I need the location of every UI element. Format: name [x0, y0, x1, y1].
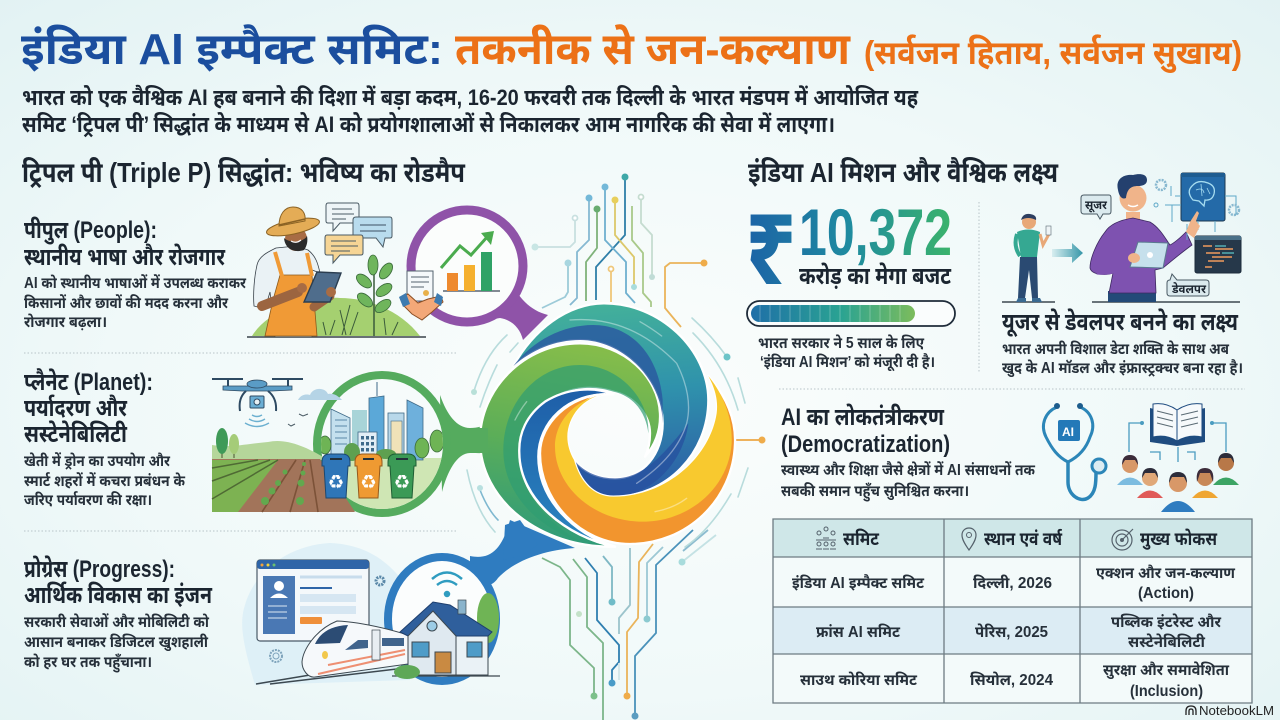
people body: [24, 274, 247, 331]
democratization heading: AI का लोकतंत्रीकरण: [781, 403, 945, 431]
table rows background: [773, 519, 1252, 703]
swirl: dark inner teal: [513, 325, 663, 423]
title: इंडिया AI इम्पैक्ट समिट:: [21, 23, 443, 74]
divider: [779, 388, 1245, 390]
table header: summit: समिट: [843, 529, 879, 549]
table row: France: [816, 612, 1222, 651]
planet body: जरिए पर्यावरण की रक्षा।: [24, 491, 152, 509]
table row: France: पेरिस, 2025: [975, 622, 1048, 641]
icon: certificate and handshake: [399, 271, 443, 320]
big number: [745, 183, 952, 308]
divider: [24, 352, 456, 354]
panel: people: [24, 203, 548, 340]
arrow: user to developer: [1052, 243, 1083, 263]
callout: user bubble: [1081, 195, 1111, 219]
table row: South Korea: साउथ कोरिया समिट: [800, 671, 918, 689]
icon: blue ring: [388, 520, 575, 681]
heading: India AI mission: इंडिया AI मिशन और वैश्विक लक्ष्य: [748, 156, 1059, 188]
progress body: आसान बनाकर डिजिटल खुशहाली: [24, 633, 208, 652]
background blob: [242, 543, 410, 685]
user to developer body: खुद के AI मॉडल और इंफ्रास्ट्रक्चर बना रहा है।: [1002, 358, 1243, 378]
circuit lines bottom: [542, 530, 716, 720]
icon: drone: [212, 379, 303, 426]
table header: focus: मुख्य फोकस: [1140, 529, 1218, 550]
title: (सर्वजन हिताय, सर्वजन सुखाय): [864, 34, 1242, 74]
budget caption: करोड़ का मेगा बजट: [799, 262, 952, 290]
swirl: blue band: [519, 389, 615, 547]
planet body: [24, 451, 186, 509]
planet heading: [24, 368, 153, 448]
table header: place and year: स्थान एवं वर्ष: [984, 528, 1063, 549]
table row: India: दिल्ली, 2026: [973, 574, 1052, 592]
icon: wifi: [432, 572, 462, 596]
planet heading: प्लैनेट (Planet):: [24, 368, 153, 396]
icon: developer person: [1090, 174, 1192, 302]
table: summits: [773, 519, 1252, 703]
icon: recycling bins: ♻: [395, 474, 409, 490]
progress bar: [747, 301, 955, 326]
illustration: farm field: [212, 414, 355, 512]
chart: growth bars and arrow: [441, 231, 500, 291]
democratization body: [781, 460, 1036, 502]
progress heading: प्रोग्रेस (Progress):: [24, 555, 175, 583]
icon: code panel: [1195, 236, 1241, 273]
intro text: [22, 84, 918, 138]
swirl: dark lower blue: [574, 423, 688, 497]
icon: bullet train: [256, 621, 408, 684]
people heading: [24, 216, 225, 271]
people heading: स्थानीय भाषा और रोजगार: [24, 243, 225, 271]
planet heading: पर्यादरण और: [24, 394, 127, 422]
table row: France: सस्टेनेबिलिटी: [1128, 632, 1205, 651]
progress body: [24, 612, 209, 673]
panel: progress: [24, 520, 575, 685]
icon: recycling bins: ♻: [362, 474, 376, 490]
user to developer heading: यूजर से डेवलपर बनने का लक्ष्य: [1002, 308, 1239, 337]
intro text: भारत को एक वैश्विक AI हब बनाने की दिशा में बड़ा कदम, 16-20 फरवरी तक दिल्ली के भारत मंडपम में आयोजित यह: [22, 84, 918, 111]
icon: house: [392, 600, 500, 679]
democratization body: स्वास्थ्य और शिक्षा जैसे क्षेत्रों में AI संसाधनों तक: [781, 460, 1036, 479]
people body: रोजगार बढ़ला।: [24, 313, 107, 331]
connector to democratization: [735, 436, 766, 444]
icon: small user: [1002, 214, 1240, 302]
illustration: smart city: [319, 382, 444, 513]
big number: ₹: [745, 183, 796, 308]
callout: user bubble: सूजर: [1085, 198, 1108, 213]
icon: group of people: [1117, 453, 1239, 512]
table row: India: एक्शन और जन-कल्याण: [1096, 564, 1235, 582]
table row: India: [792, 564, 1235, 602]
swirl: highlights: [515, 320, 689, 512]
progress heading: आर्थिक विकास का इंजन: [24, 581, 213, 609]
big number: 10,372: [799, 195, 952, 269]
budget body: [758, 333, 935, 372]
intro text: समिट ‘ट्रिपल पी’ सिद्धांत के माध्यम से AI को प्रयोगशालाओं से निकालकर आम नागरिक की सेवा में लाएगा।: [22, 112, 835, 138]
icon: gears: [270, 577, 384, 662]
decorative arcs around swirl: [467, 318, 748, 547]
divider: [978, 202, 980, 373]
icon: browser window: [257, 560, 369, 641]
table row: South Korea: सुरक्षा और समावेशिता: [1103, 660, 1229, 680]
budget body: भारत सरकार ने 5 साल के लिए: [758, 333, 925, 352]
planet body: खेती में ड्रोन का उपयोग और: [24, 451, 171, 470]
watermark: NotebookLM: NotebookLM: [1199, 703, 1274, 718]
swirl: green band: [480, 343, 660, 547]
table header: summit: [816, 527, 879, 549]
progress body: को हर घर तक पहुँचाना।: [24, 652, 152, 673]
democratization heading: [781, 403, 950, 458]
callout: developer bubble: डेवलपर: [1171, 281, 1207, 296]
user to developer body: भारत अपनी विशाल डेटा शक्ति के साथ अब: [1002, 339, 1229, 358]
user to developer body: [1002, 339, 1243, 378]
swirl: yellow band: [555, 376, 732, 522]
table row: India: इंडिया AI इम्पैक्ट समिट: [792, 573, 925, 592]
table header: place and year: [962, 528, 1063, 550]
table row: France: फ्रांस AI समिट: [816, 623, 901, 641]
heading: triple P: ट्रिपल पी (Triple P) सिद्धांत: भविष्य का रोडमैप: [22, 156, 466, 189]
swirl logo: [480, 303, 735, 547]
swirl: dark green band: [503, 365, 648, 542]
icon: cloud: [298, 389, 342, 400]
panel: user to developer: [1002, 173, 1243, 378]
icon: purple lens ring: [411, 210, 548, 340]
icon: recycling bins: ♻: [329, 474, 343, 490]
budget body: ‘इंडिया AI मिशन’ को मंजूरी दी है।: [760, 352, 935, 372]
table row: South Korea: सियोल, 2024: [970, 671, 1053, 689]
icon: open book: [1129, 404, 1226, 462]
icon: recycling bins: [322, 454, 416, 498]
panel: planet: [24, 368, 492, 513]
table row: India: (Action): [1138, 585, 1194, 602]
progress body: सरकारी सेवाओं और मोबिलिटी को: [24, 612, 209, 631]
icon: farmer with tablet: [247, 203, 426, 337]
democratization body: सबकी समान पहुँच सुनिश्चित करना।: [781, 481, 969, 502]
table header: focus: [1112, 529, 1218, 550]
people body: AI को स्थानीय भाषाओं में उपलब्ध कराकर: [24, 274, 247, 292]
title: तकनीक से जन-कल्याण: [455, 23, 852, 74]
budget panel: [745, 183, 955, 372]
table row: South Korea: [800, 660, 1229, 700]
people heading: पीपुल (People):: [24, 216, 157, 245]
table row: France: पब्लिक इंटरेस्ट और: [1111, 612, 1222, 631]
icon: tree: [477, 593, 499, 643]
icon: stethoscope with AI chip: [1043, 403, 1106, 500]
table row: South Korea: (Inclusion): [1130, 683, 1203, 700]
swirl: teal band: [513, 303, 708, 497]
icon: stethoscope with AI chip: AI: [1062, 425, 1074, 439]
icon: AI brain screen: [1154, 173, 1239, 240]
panel: democratization: [781, 403, 1239, 512]
democratization heading: (Democratization): [781, 431, 950, 458]
divider: [24, 530, 458, 532]
icon: green ring: [317, 375, 492, 513]
progress heading: [24, 555, 213, 609]
circuit lines top: [532, 174, 708, 327]
callout: developer bubble: [1167, 274, 1209, 296]
swirl joins: [476, 428, 538, 560]
people body: किसानों और छावों की मदद करना और: [24, 294, 229, 312]
planet body: स्मार्ट शहरों में कचरा प्रबंधन के: [24, 471, 186, 490]
planet heading: सस्टेनेबिलिटी: [24, 420, 128, 448]
title: [21, 23, 1242, 74]
swirl: orange band: [540, 376, 735, 544]
